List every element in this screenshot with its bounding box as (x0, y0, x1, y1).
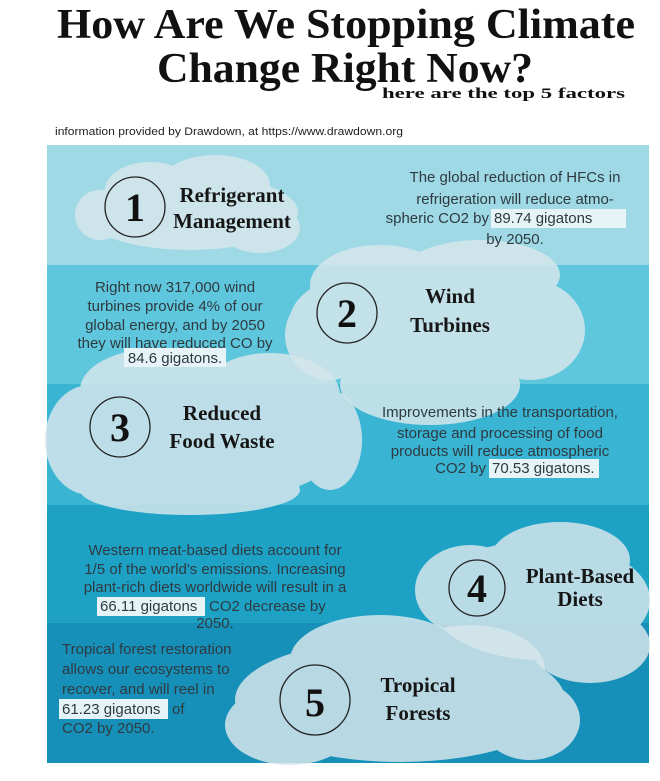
panel: factor 5 tropical forests (59, 641, 456, 737)
number 5: 5 (305, 680, 325, 725)
text 2: they will have reduced CO by (77, 335, 273, 352)
heading 4: Diets (557, 587, 603, 611)
source note: information provided by Drawdown, at https://www.drawdown.org (55, 126, 403, 138)
text 1: The global reduction of HFCs in (410, 169, 620, 186)
heading 2: Turbines (410, 313, 490, 337)
heading 4: Plant-Based (526, 564, 635, 588)
text 1: refrigeration will reduce atmo- (416, 191, 614, 208)
heading 1 (173, 183, 291, 233)
text 1: by 2050. (486, 231, 544, 248)
number 4 (449, 560, 505, 616)
heading 5: Tropical (380, 673, 456, 697)
cloud 3 (45, 348, 362, 515)
title: How Are We Stopping Climate (57, 2, 635, 48)
text 3: 70.53 gigatons. (492, 460, 595, 477)
text 5: allows our ecosystems to (62, 661, 230, 678)
panel: factor 2 wind (77, 279, 490, 367)
subtitle: here are the top 5 factors (382, 86, 625, 102)
number 4: 4 (467, 566, 487, 611)
heading 5: Forests (386, 701, 450, 725)
text 4: 1/5 of the world's emissions. Increasing (84, 561, 346, 578)
text 5: of (172, 701, 185, 718)
heading 1: Refrigerant (180, 183, 284, 207)
text 5 (59, 641, 232, 737)
text 4: plant-rich diets worldwide will result in a (84, 579, 347, 596)
heading 1: Management (173, 209, 291, 233)
title: Change Right Now? (157, 46, 533, 92)
text 1 (386, 169, 626, 248)
panel: factor 1 refrigerant (105, 169, 626, 248)
text 3: storage and processing of food (397, 425, 603, 442)
cloud 2 (285, 240, 585, 425)
text 2: turbines provide 4% of our (87, 298, 263, 315)
heading 2 (410, 284, 490, 337)
number 1 (105, 177, 165, 237)
text 2: 84.6 gigatons. (128, 350, 222, 367)
text 4: CO2 decrease by (209, 598, 326, 615)
heading 3 (169, 401, 275, 453)
text 3 (382, 404, 618, 478)
panel: factor 3 food waste (90, 397, 618, 478)
text 1: spheric CO2 by (386, 210, 489, 227)
text 4: 66.11 gigatons (100, 598, 197, 615)
text 4: Western meat-based diets account for (88, 542, 342, 559)
cloud 4 (415, 522, 650, 683)
text 5: 61.23 gigatons (62, 701, 160, 718)
number 2 (317, 283, 377, 343)
heading 4 (526, 564, 635, 611)
text 5: Tropical forest restoration (62, 641, 232, 658)
number 3: 3 (110, 405, 130, 450)
heading 3: Food Waste (169, 429, 275, 453)
text 3: products will reduce atmospheric (391, 443, 610, 460)
text 4: 2050. (196, 615, 234, 632)
title (57, 2, 635, 92)
number 1: 1 (125, 185, 145, 230)
cloud 1 (75, 155, 300, 253)
number 5 (280, 665, 350, 735)
text 5: recover, and will reel in (62, 681, 215, 698)
text 3: CO2 by (435, 460, 486, 477)
number 3 (90, 397, 150, 457)
text 2 (77, 279, 273, 367)
text 4 (84, 542, 347, 632)
text 3: Improvements in the transportation, (382, 404, 618, 421)
heading 3: Reduced (183, 401, 261, 425)
text 2: global energy, and by 2050 (85, 317, 265, 334)
cloud 5 (225, 615, 580, 765)
heading 5 (380, 673, 456, 725)
text 5: CO2 by 2050. (62, 720, 155, 737)
number 2: 2 (337, 291, 357, 336)
heading 2: Wind (425, 284, 475, 308)
panel: background bands (47, 145, 649, 763)
text 2: Right now 317,000 wind (95, 279, 255, 296)
panel: factor 4 plant-based (84, 542, 635, 632)
text 1: 89.74 gigatons (494, 210, 592, 227)
